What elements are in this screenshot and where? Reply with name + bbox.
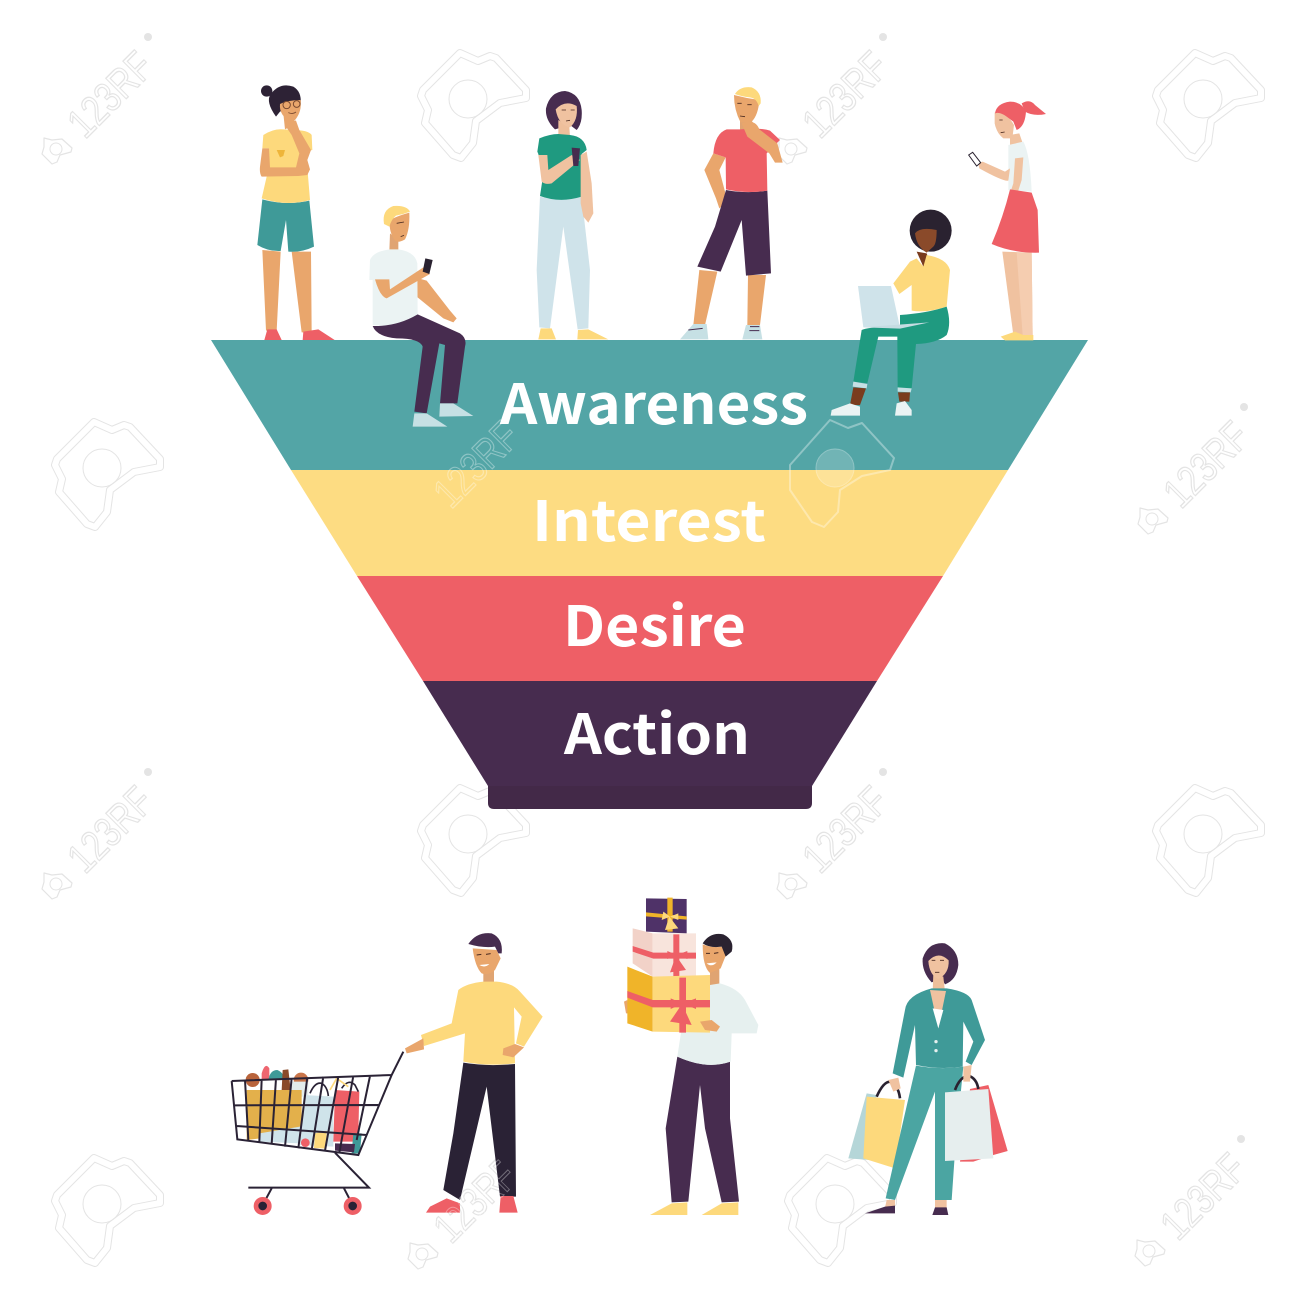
label: Awareness: Awareness [499,360,808,440]
watermark over trousers: 123RF [422,1152,526,1256]
person: woman with ponytail and phone [969,101,1046,340]
funnel band: interest [291,470,1008,576]
label: Action: Action [563,690,750,770]
label: Interest: Interest [532,477,766,557]
funnel band: action [423,681,877,786]
person: man in yellow sweater [405,933,543,1213]
watermark layer: 123RF [58,777,162,881]
funnel band: awareness [211,340,1088,470]
icon: shopping cart with goods [232,1052,403,1215]
person: man carrying gift boxes [624,898,758,1215]
funnel [211,340,1088,809]
funnel spout [488,786,812,809]
person: seated woman with laptop [831,210,952,416]
label: Desire: Desire [563,582,746,662]
person: woman in teal suit with shopping bags [848,943,1008,1215]
watermark layer: 123RF [424,1147,528,1251]
watermark on funnel [424,412,894,527]
funnel band: desire [357,576,943,681]
icon: purple gift [646,898,687,933]
watermark layer: 123RF [1154,412,1258,516]
watermark layer: 123RF [1151,1144,1255,1248]
watermark layer: 123RF [793,42,897,146]
top figures: right group [680,87,1046,416]
icon: pink gift [633,928,696,977]
watermark layer: 123RF [58,42,162,146]
person: woman in yellow shirt thinking [257,85,335,340]
watermark layer: 123RF [793,777,897,881]
watermark on funnel: 123RF [424,412,528,516]
bottom figures: cart group [232,933,543,1256]
person: blond man in red shirt thinking [680,87,783,339]
top figures: left group [257,85,608,427]
person: seated blond man with phone [369,206,473,427]
icon: yellow gift [627,967,710,1033]
bottom figures: gifts and bags [624,898,1008,1215]
person: woman in green shirt with phone [537,91,608,339]
